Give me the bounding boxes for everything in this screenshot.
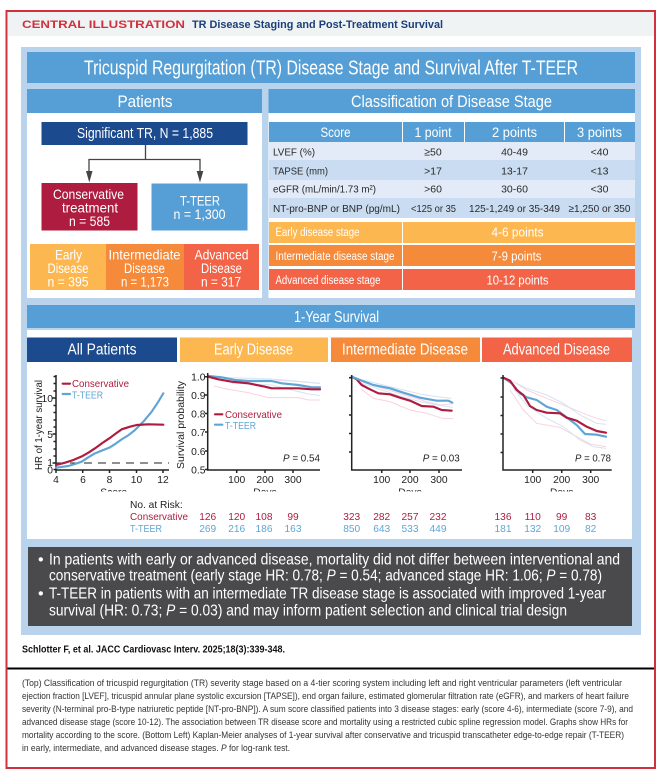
table: number at risk: 120	[228, 512, 246, 523]
chart: advanced disease survival: Days	[550, 488, 573, 498]
advanced disease box: Disease	[201, 260, 242, 276]
chart: early disease survival: Days	[253, 488, 277, 498]
advanced disease box: Advanced	[194, 246, 248, 262]
table: number at risk: 163	[284, 524, 302, 535]
score table header: 1 point	[414, 124, 452, 140]
tab: intermediate disease	[331, 338, 480, 362]
early disease stage row	[269, 222, 635, 243]
early disease box: n = 395	[48, 274, 89, 290]
divider line	[7, 668, 655, 670]
table: number at risk: 216	[228, 524, 246, 535]
chart: intermediate disease survival: Days	[398, 488, 422, 498]
intermediate disease stage row: Intermediate disease stage	[276, 251, 394, 263]
intermediate disease box: Disease	[124, 260, 165, 276]
key findings box: survival (HR: 0.73; P = 0.03) and may inform patient selection and clinical trial design	[49, 602, 567, 620]
panel: classification of disease stage	[268, 89, 635, 298]
chart: HR by score, all patients: 10	[131, 475, 142, 486]
table: number at risk: 232	[430, 512, 447, 523]
table: number at risk: 269	[199, 524, 217, 535]
conservative treatment box	[42, 183, 138, 230]
chart: early disease survival: 0.8	[191, 410, 206, 420]
T-TEER box: T-TEER	[180, 192, 220, 208]
table: number at risk: 850	[343, 524, 361, 535]
table: number at risk: 282	[373, 512, 391, 523]
table: number at risk: 257	[402, 512, 419, 523]
chart: HR by score, all patients: Conservative	[72, 378, 129, 390]
chart: early disease survival: T-TEER	[225, 420, 256, 432]
score table rows: ≥1,250 or 350	[568, 203, 631, 215]
table: number at risk: 323	[343, 512, 361, 523]
significant TR box	[42, 122, 248, 145]
conservative treatment box: Conservative	[53, 186, 124, 202]
tab: advanced disease	[482, 338, 632, 362]
score table header: Score	[320, 124, 351, 140]
intermediate disease stage row	[269, 245, 635, 266]
header band: TR Disease Staging and Post-Treatment Survival	[192, 19, 443, 31]
main title	[27, 52, 635, 83]
key findings box: •	[38, 552, 44, 568]
score table rows: <40	[591, 146, 609, 158]
early disease stage row: Early disease stage	[276, 227, 360, 239]
early disease stage row: 4-6 points	[492, 224, 544, 240]
1-year survival heading	[27, 305, 635, 328]
significant TR box: Significant TR, N = 1,885	[77, 125, 213, 142]
table: number at risk: 126	[199, 512, 217, 523]
chart: early disease survival: 300	[284, 475, 302, 486]
table: number at risk: 533	[402, 524, 419, 535]
score table rows: <30	[591, 184, 609, 196]
chart: HR by score, all patients: 6	[80, 475, 86, 486]
key findings box: conservative treatment (early stage HR: 0.78; P = 0.54; advanced stage HR: 1.06; P = 0.78)	[49, 568, 602, 584]
score table header: 2 points	[492, 124, 537, 140]
chart: advanced disease survival: 200	[553, 475, 571, 486]
chart: HR by score, all patients: 0	[47, 466, 53, 476]
table: number at risk: 110	[525, 512, 541, 523]
intermediate disease box: Intermediate	[108, 246, 181, 262]
chart: intermediate disease survival: 300	[430, 475, 448, 486]
T-TEER box: n = 1,300	[174, 206, 226, 222]
advanced disease stage row: 10-12 points	[486, 272, 549, 288]
key findings box	[28, 547, 632, 626]
table: number at risk: Conservative	[130, 511, 188, 523]
chart: intermediate disease survival: 200	[401, 475, 419, 486]
T-TEER box	[152, 184, 248, 230]
advanced disease box	[184, 244, 259, 290]
classification heading	[268, 89, 635, 113]
intermediate disease stage row: 7-9 points	[492, 248, 542, 264]
tab: all patients: All Patients	[68, 342, 137, 358]
tab: early disease	[180, 338, 328, 362]
score table rows: 40-49	[501, 146, 528, 158]
key findings box: •	[38, 586, 44, 602]
conservative treatment box: treatment	[62, 200, 118, 216]
header band: CENTRAL ILLUSTRATION	[22, 19, 185, 31]
table: number at risk: 83	[585, 512, 597, 523]
patients heading: Patients	[118, 92, 172, 111]
panel: 1-year survival	[27, 330, 632, 539]
tab: all patients	[27, 338, 177, 362]
table: number at risk: 108	[256, 512, 273, 523]
table: number at risk	[130, 500, 597, 535]
score table rows	[269, 142, 635, 218]
citation: Schlotter F, et al. JACC Cardiovasc Interv. 2025;18(3):339-348.	[22, 644, 285, 656]
figure caption: in early, intermediate, and advanced disease stages. P for log-rank test.	[22, 743, 290, 753]
intermediate disease box	[106, 244, 184, 290]
score table header: 3 points	[577, 124, 622, 140]
tab: intermediate disease: Intermediate Disease	[342, 342, 468, 358]
figure caption	[22, 678, 633, 753]
chart: HR by score, all patients	[33, 375, 169, 498]
table: number at risk: 643	[373, 524, 391, 535]
table: number at risk: 136	[494, 512, 512, 523]
chart: early disease survival: 0.9	[191, 391, 206, 402]
intermediate disease box: n = 1,173	[121, 274, 169, 290]
advanced disease stage row: Advanced disease stage	[276, 275, 380, 287]
chart: HR by score, all patients: 1	[47, 458, 53, 469]
table: number at risk: 109	[553, 524, 571, 535]
chart: early disease survival: Conservative	[225, 409, 282, 421]
chart: early disease survival	[175, 372, 320, 498]
chart: intermediate disease survival: 100	[373, 475, 391, 486]
chart: HR by score, all patients: 12	[157, 475, 169, 486]
chart: advanced disease survival: 300	[582, 475, 600, 486]
outer figure panel	[21, 47, 641, 635]
score table rows: TAPSE (mm)	[273, 166, 328, 178]
chart: early disease survival: 100	[228, 475, 246, 486]
arrows: split to treatment groups	[86, 145, 203, 182]
score table rows: <125 or 35	[411, 203, 456, 215]
advanced disease stage row	[269, 269, 635, 290]
table: number at risk: No. at Risk:	[130, 500, 183, 511]
chart: advanced disease survival: P = 0.78	[575, 452, 611, 464]
score table rows: eGFR (mL/min/1.73 m²)	[273, 184, 376, 196]
chart: advanced disease survival	[500, 375, 612, 498]
chart: intermediate disease survival: P = 0.03	[423, 452, 460, 464]
early disease box	[30, 244, 106, 290]
patients heading	[27, 89, 262, 113]
chart: intermediate disease survival	[349, 375, 462, 498]
chart: HR by score, all patients: Score	[100, 488, 127, 498]
figure caption: (Top) Classification of tricuspid regurgitation (TR) severity stage based on a 4-tier scoring system including left and right ventricular parameters (left ventricular	[22, 678, 622, 688]
score table header	[269, 122, 635, 142]
table: number at risk: 132	[524, 524, 542, 535]
tab: advanced disease: Advanced Disease	[503, 342, 610, 358]
early disease box: Early	[55, 246, 82, 262]
score table rows: NT-pro-BNP or BNP (pg/mL)	[273, 203, 400, 215]
chart: HR by score, all patients: 5	[47, 430, 53, 441]
1-year survival heading: 1-Year Survival	[294, 309, 379, 326]
chart: HR by score, all patients: T-TEER	[72, 390, 103, 402]
chart: early disease survival: 0.5	[191, 466, 206, 476]
chart: HR by score, all patients: HR of 1-year survival	[33, 380, 45, 470]
chart: early disease survival: P = 0.54	[283, 452, 320, 464]
table: number at risk: 99	[287, 512, 299, 523]
table: number at risk: T-TEER	[130, 523, 162, 535]
score table rows: 125-1,249 or 35-349	[469, 203, 560, 215]
classification heading: Classification of Disease Stage	[351, 92, 552, 111]
conservative treatment box: n = 585	[69, 213, 110, 229]
tab: early disease: Early Disease	[214, 342, 293, 358]
early disease box: Disease	[48, 260, 89, 276]
score table rows: >17	[424, 166, 442, 178]
chart: early disease survival: 0.7	[191, 428, 206, 439]
chart: early disease survival: Survival probability	[175, 380, 187, 469]
score table rows: 13-17	[501, 166, 528, 178]
panel: patients	[27, 89, 262, 298]
advanced disease box: n = 317	[201, 274, 241, 290]
chart: HR by score, all patients: 4	[53, 475, 59, 486]
chart: early disease survival: 200	[256, 475, 274, 486]
score table rows: 30-60	[501, 184, 528, 196]
header band	[8, 12, 654, 36]
score table rows: ≥50	[424, 146, 442, 158]
chart: HR by score, all patients: 10	[42, 394, 53, 405]
score table rows: >60	[424, 184, 442, 196]
chart: advanced disease survival: 100	[524, 475, 542, 486]
table: number at risk: 186	[256, 524, 273, 535]
score table rows: LVEF (%)	[273, 146, 315, 158]
table: number at risk: 449	[430, 524, 447, 535]
chart: early disease survival: 0.6	[191, 447, 206, 458]
chart: early disease survival: 1.0	[191, 372, 206, 384]
score table rows: <13	[591, 166, 609, 178]
table: number at risk: 82	[585, 524, 597, 535]
table: number at risk: 181	[494, 524, 512, 535]
chart: HR by score, all patients: 8	[107, 475, 113, 486]
table: number at risk: 99	[556, 512, 568, 523]
